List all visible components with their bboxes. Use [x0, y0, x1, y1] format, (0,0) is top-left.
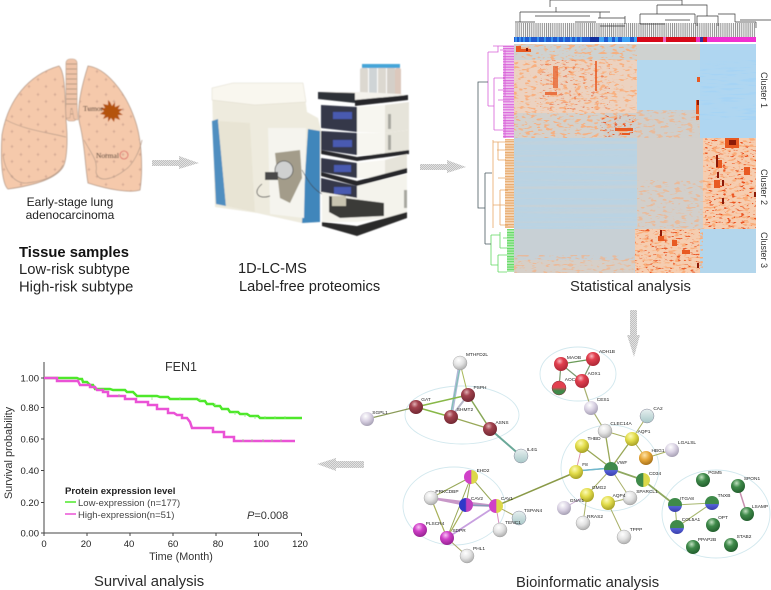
- icon: left lung: [1, 66, 67, 189]
- node labels: PHL1: [473, 546, 485, 552]
- node labels: MTHFD2L: [466, 352, 488, 358]
- cluster labels: Cluster 1: [759, 72, 769, 108]
- y tick labels: 0.20: [20, 498, 39, 509]
- node labels: LSAMP: [752, 504, 768, 510]
- y tick labels: 0.60: [20, 434, 39, 446]
- network edges: [367, 359, 747, 556]
- x tick labels: 40: [124, 539, 134, 550]
- x tick labels: 0: [41, 539, 47, 550]
- node labels: SHMT2: [457, 407, 473, 413]
- y tick labels: 0.80: [20, 403, 39, 414]
- legend: High-expression(n=51): [78, 510, 174, 521]
- node labels: AOX1: [588, 371, 601, 377]
- censor ticks: [119, 394, 285, 442]
- sample color bar: [514, 37, 756, 42]
- axis titles: Survival probability: [3, 406, 15, 499]
- node labels: TENC1: [505, 520, 521, 526]
- node labels: SPARCL1: [636, 489, 658, 495]
- node labels: CA2: [653, 406, 663, 412]
- y tick labels: 0.40: [20, 466, 39, 477]
- node labels: ITGA8: [680, 496, 694, 502]
- caption line 2: adenocarcinoma: [26, 208, 115, 222]
- left dendrogram: [478, 46, 514, 272]
- node labels: TSPAN4: [524, 508, 542, 514]
- arrow: lungs to instrument: [152, 156, 199, 169]
- node labels: VWF: [617, 460, 627, 466]
- y tick labels: 1.00: [20, 374, 39, 384]
- node labels: CAV2: [471, 496, 483, 502]
- y tick labels: [20, 374, 39, 540]
- node labels: PSPH: [473, 385, 487, 391]
- node labels: CAV1: [501, 496, 513, 502]
- chart: clustered heatmap: [478, 0, 771, 273]
- node labels: RRAS2: [587, 514, 603, 520]
- node labels: AOC: [565, 377, 576, 383]
- text block: tissue samples: High-risk subtype: [19, 280, 133, 296]
- node labels: GNAI1: [570, 498, 585, 504]
- node labels: COL5A1: [682, 517, 701, 523]
- caption: 1D-LC-MS: Label-free proteomics: [239, 279, 380, 295]
- node labels: CLEC14A: [610, 421, 632, 427]
- node labels: HBG1: [651, 448, 665, 454]
- axes: [41, 362, 302, 536]
- caption: 1D-LC-MS: 1D-LC-MS: [238, 261, 307, 277]
- x tick labels: 20: [81, 539, 91, 550]
- low-expression curve: [44, 378, 302, 418]
- x tick labels: 60: [168, 539, 178, 550]
- nodes: cluster serine metabolism: [360, 356, 528, 463]
- chart: protein interaction network: [360, 347, 770, 563]
- caption: 1D-LC-MS: [238, 261, 380, 295]
- icon: trachea: [65, 59, 78, 121]
- legend: Low-expression (n=177): [78, 498, 180, 509]
- text block: tissue samples: Low-risk subtype: [19, 262, 130, 278]
- solvent bottles: [360, 64, 401, 96]
- node labels: PGM5: [708, 470, 722, 476]
- node labels: SDPR: [452, 528, 466, 534]
- hot spots: [516, 46, 750, 254]
- node labels: STAB2: [737, 534, 752, 540]
- LC module 3: [321, 154, 407, 186]
- icon: right lung: [79, 66, 142, 191]
- top dendrogram: [515, 0, 771, 37]
- node labels: AQP4: [613, 493, 626, 499]
- illustration: lungs with tumor and normal samples: [1, 59, 142, 191]
- LC module 4 with autosampler: [321, 174, 407, 236]
- node labels: TPPP: [630, 527, 642, 533]
- heading: statistical analysis: Statistical analysis: [570, 279, 691, 295]
- node labels: AQP1: [638, 429, 651, 435]
- cluster labels: Cluster 2: [759, 169, 769, 205]
- node labels: CES1: [597, 397, 610, 403]
- arrow: network to survival: [317, 458, 364, 471]
- x axis title: Time (Month): [149, 551, 213, 563]
- caption: early-stage lung adenocarcinoma: Early-stage lung: [27, 195, 113, 209]
- nodes: cluster green: [668, 473, 754, 554]
- illustration: LC-MS instrument: [212, 64, 409, 236]
- node labels: PPAP2B: [698, 537, 716, 543]
- x tick labels: 80: [213, 539, 223, 550]
- node labels: IL4I1: [527, 447, 538, 453]
- node labels: TNXB: [718, 493, 730, 499]
- node labels: [372, 349, 768, 552]
- node labels: PRKCDBP: [435, 489, 459, 495]
- LC module 2: [321, 130, 409, 161]
- arrow: instrument to heatmap: [420, 160, 466, 173]
- icon: tumor: [83, 100, 123, 122]
- LC stack top tray: [318, 92, 408, 106]
- text block: tissue samples: [19, 245, 133, 296]
- nodes: cluster yellow: [557, 409, 679, 544]
- x tick labels: [41, 539, 308, 550]
- heading: survival analysis: Survival analysis: [94, 574, 204, 590]
- chart: Kaplan-Meier survival curve: [3, 360, 308, 563]
- node labels: SPON1: [744, 476, 760, 482]
- node labels: OPT: [718, 515, 728, 521]
- mass spectrometer: [212, 83, 322, 223]
- node labels: SGPL1: [372, 410, 388, 416]
- icon: tumor: Tumor: [83, 104, 104, 113]
- node labels: GMG2: [592, 485, 606, 491]
- y tick labels: 0.00: [20, 528, 39, 540]
- text block: tissue samples: Tissue samples: [19, 245, 129, 261]
- cluster ellipses: [403, 347, 770, 558]
- legend: Protein expression level: [65, 486, 175, 497]
- cluster labels: [759, 72, 769, 268]
- node labels: CD34: [649, 471, 661, 477]
- node labels: PLSCR4: [426, 521, 445, 527]
- nodes: cluster magenta: [413, 470, 526, 563]
- x tick labels: 120: [292, 539, 308, 550]
- p value: P=0.008: [247, 510, 288, 522]
- arrow: heatmap to network: [627, 310, 640, 357]
- node labels: GAT: [421, 397, 431, 403]
- node labels: ADH1B: [599, 349, 615, 355]
- chart title: FEN1: [165, 360, 197, 374]
- nodes: cluster red: [552, 352, 600, 415]
- heatmap cells: [514, 44, 756, 273]
- node labels: THBD: [587, 436, 601, 442]
- icon: normal sample: Normal: [96, 151, 119, 160]
- node labels: LGALSL: [678, 440, 696, 446]
- cluster labels: Cluster 3: [759, 232, 769, 268]
- node labels: EHD2: [477, 468, 490, 474]
- node labels: MAOB: [567, 355, 581, 361]
- node labels: ASNS: [495, 420, 509, 426]
- LC module 1: [321, 102, 409, 133]
- legend: [65, 486, 180, 521]
- high-expression curve: [44, 378, 295, 441]
- node labels: F8: [582, 462, 588, 468]
- x tick labels: 100: [253, 539, 269, 550]
